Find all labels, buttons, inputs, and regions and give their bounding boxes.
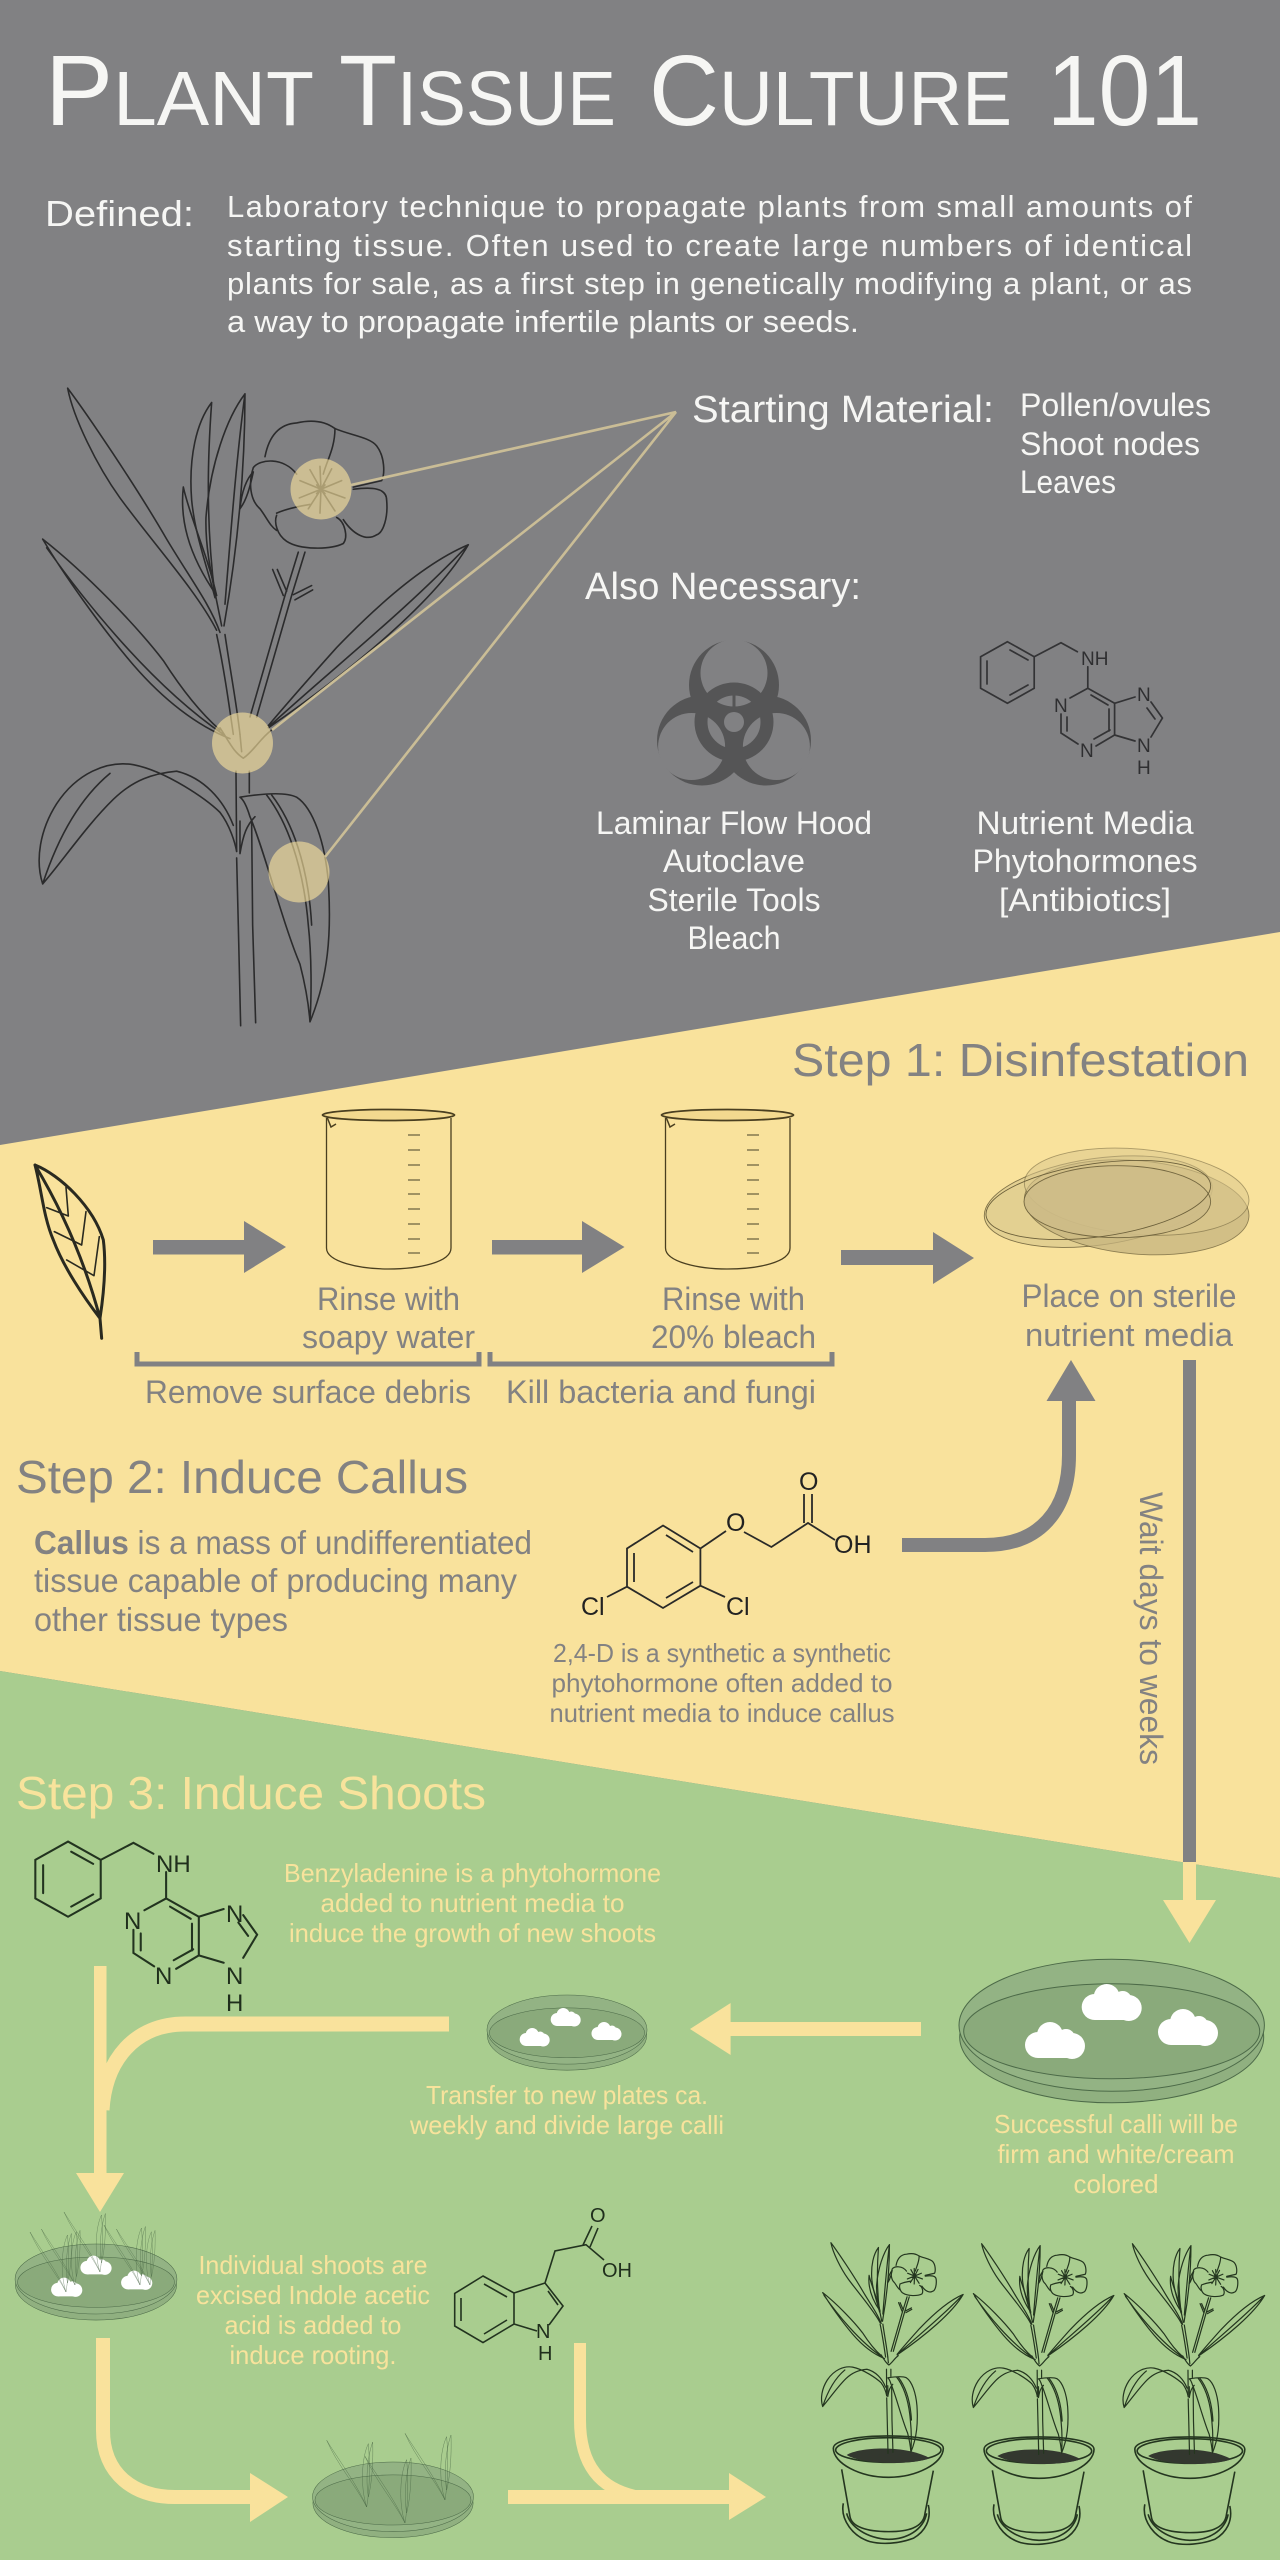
equipment list: Autoclave bbox=[663, 843, 805, 879]
molecule: benzyladenine: N bbox=[1080, 741, 1094, 762]
text: remove surface debris: Remove surface debris bbox=[145, 1374, 471, 1410]
molecule: benzyladenine large: N bbox=[124, 1908, 141, 1935]
icon: sterile petri dishes bbox=[978, 1139, 1253, 1264]
icon: beaker soapy water bbox=[322, 1110, 454, 1269]
title: PLANT bbox=[45, 35, 314, 147]
step 1 heading: Step 1: Disinfestation bbox=[792, 1034, 1249, 1086]
equipment list: Bleach bbox=[688, 920, 780, 956]
text: place on sterile nutrient media: Place on sterile bbox=[1022, 1278, 1236, 1314]
definition paragraph: a way to propagate infertile plants or seeds. bbox=[227, 304, 859, 339]
icon: large petri dish with calli bbox=[959, 1959, 1264, 2103]
equipment list: Laminar Flow Hood bbox=[596, 805, 872, 841]
molecule: 2,4-D bbox=[581, 1468, 872, 1621]
starting material list: Pollen/ovules bbox=[1020, 387, 1211, 423]
plant line drawing bbox=[39, 388, 468, 1026]
molecule: benzyladenine large: H bbox=[226, 1990, 243, 2017]
text: successful calli bbox=[994, 2109, 1238, 2199]
starting material list: Shoot nodes bbox=[1020, 426, 1200, 462]
text: 2,4-D description: 2,4-D is a synthetic a synthetic bbox=[553, 1638, 891, 1668]
molecule: benzyladenine large: N bbox=[226, 1963, 243, 1990]
molecule: 2,4-D: Cl bbox=[726, 1593, 750, 1621]
molecule: 2,4-D: O bbox=[799, 1468, 818, 1496]
molecule: benzyladenine: N bbox=[1054, 696, 1068, 717]
molecule: benzyladenine: N bbox=[1137, 685, 1151, 706]
icon: biohazard bbox=[657, 642, 811, 786]
text: benzyladenine description: Benzyladenine is a phytohormone bbox=[284, 1858, 661, 1888]
starting material heading: Starting Material: bbox=[692, 389, 994, 431]
arrow: hormone and transfer to shoot plate bbox=[76, 1966, 449, 2212]
media list: Phytohormones bbox=[972, 843, 1198, 879]
text: kill bacteria and fungi: Kill bacteria and fungi bbox=[506, 1374, 816, 1410]
text: rinse with soapy water bbox=[302, 1281, 475, 1355]
arrow: 2,4-D to media bbox=[902, 1360, 1096, 1545]
molecule: 2,4-D: OH bbox=[834, 1531, 872, 1559]
also necessary heading: Also Necessary: bbox=[585, 566, 861, 608]
text: individual shoots bbox=[196, 2250, 430, 2370]
media list bbox=[972, 805, 1198, 918]
text: individual shoots: excised Indole acetic bbox=[196, 2280, 430, 2310]
text: successful calli: Successful calli will be bbox=[994, 2109, 1238, 2139]
text: successful calli: colored bbox=[1074, 2169, 1158, 2199]
potted plant 3 bbox=[1123, 2244, 1265, 2544]
arrow: indole acid and bottom plate to pots bbox=[508, 2343, 766, 2520]
molecule: benzyladenine large: N bbox=[226, 1901, 243, 1928]
arrow: large dish to small dish bbox=[690, 2003, 921, 2055]
title bbox=[45, 35, 1202, 147]
highlight: shoot node bbox=[212, 712, 273, 774]
highlight: leaf bbox=[268, 842, 330, 902]
potted plant 1 bbox=[822, 2243, 963, 2543]
definition label: Defined: bbox=[45, 193, 194, 234]
text: place on sterile nutrient media: nutrient media bbox=[1025, 1317, 1233, 1353]
background: yellow section bbox=[0, 932, 1280, 1878]
molecule: benzyladenine: N bbox=[1137, 736, 1151, 757]
text: rinse with bleach: Rinse with bbox=[662, 1281, 805, 1317]
title: CULTURE bbox=[649, 35, 1012, 147]
background: green section bbox=[0, 1671, 1280, 2560]
molecule: benzyladenine large bbox=[35, 1842, 257, 2017]
text: 2,4-D description: phytohormone often added to bbox=[552, 1668, 892, 1698]
callus description bbox=[34, 1524, 532, 1638]
molecule: benzyladenine: H bbox=[1137, 758, 1151, 779]
molecule: benzyladenine large: NH bbox=[156, 1851, 191, 1878]
callout lines to starting material bbox=[272, 412, 676, 857]
text: 2,4-D description: nutrient media to induce callus bbox=[550, 1698, 894, 1728]
definition paragraph: Laboratory technique to propagate plants from small amounts of bbox=[227, 189, 1192, 224]
callus description: Callus is a mass of undifferentiated bbox=[34, 1524, 532, 1561]
arrow: shoot plate to bottom plate bbox=[103, 2338, 288, 2522]
text: rinse with soapy water: soapy water bbox=[302, 1319, 475, 1355]
icon: beaker bleach bbox=[662, 1110, 794, 1269]
icon: petri dish with shoots on calli bbox=[15, 2212, 177, 2320]
media list: Nutrient Media bbox=[976, 805, 1194, 841]
text: successful calli: firm and white/cream bbox=[998, 2139, 1234, 2169]
definition paragraph bbox=[227, 189, 1192, 339]
molecule: indole acetic acid bbox=[455, 2205, 632, 2365]
definition paragraph: plants for sale, as a first step in genetically modifying a plant, or as bbox=[227, 266, 1192, 301]
equipment list bbox=[596, 805, 872, 956]
text: transfer to new plates: weekly and divide large calli bbox=[409, 2110, 724, 2140]
icon: petri dish with shoots bbox=[313, 2433, 473, 2538]
molecule: 2,4-D: Cl bbox=[581, 1593, 605, 1621]
step 3 heading: Step 3: Induce Shoots bbox=[16, 1767, 486, 1819]
molecule: benzyladenine: NH bbox=[1081, 649, 1108, 670]
potted plant 2 bbox=[972, 2244, 1114, 2544]
molecule: indole acetic acid: H bbox=[538, 2343, 552, 2365]
bracket: soap stage bbox=[137, 1352, 479, 1364]
starting material list: Leaves bbox=[1020, 464, 1116, 500]
callus description: other tissue types bbox=[34, 1601, 288, 1638]
callus description: tissue capable of producing many bbox=[34, 1562, 517, 1599]
illustration: oleander plant with highlighted sources bbox=[39, 388, 676, 1026]
equipment list: Sterile Tools bbox=[648, 882, 820, 918]
icon: leaf bbox=[35, 1165, 105, 1338]
text: benzyladenine description bbox=[284, 1858, 661, 1948]
starting material list bbox=[1020, 387, 1211, 500]
text: transfer to new plates bbox=[409, 2080, 724, 2140]
molecule: benzyladenine large: N bbox=[155, 1963, 172, 1990]
molecule: 2,4-D: O bbox=[726, 1509, 745, 1537]
arrow: bleach to plate bbox=[841, 1232, 974, 1284]
text: benzyladenine description: added to nutrient media to bbox=[320, 1888, 624, 1918]
title: TISSUE bbox=[339, 35, 616, 147]
molecule: indole acetic acid: N bbox=[536, 2321, 550, 2343]
step 2 heading: Step 2: Induce Callus bbox=[16, 1451, 468, 1503]
media list: [Antibiotics] bbox=[999, 882, 1171, 918]
molecule: indole acetic acid: OH bbox=[602, 2260, 632, 2282]
bracket: bleach stage bbox=[490, 1352, 832, 1364]
text: individual shoots: induce rooting. bbox=[230, 2340, 396, 2370]
icon: small petri dish with calli bbox=[487, 1995, 647, 2070]
text: place on sterile nutrient media bbox=[1022, 1278, 1236, 1353]
arrow: leaf to soapy water bbox=[153, 1221, 286, 1273]
molecule: indole acetic acid: O bbox=[590, 2205, 606, 2227]
text: 2,4-D description bbox=[550, 1638, 894, 1728]
text: rinse with bleach bbox=[651, 1281, 816, 1355]
text: benzyladenine description: induce the growth of new shoots bbox=[289, 1918, 656, 1948]
text: transfer to new plates: Transfer to new plates ca. bbox=[426, 2080, 708, 2110]
text: rinse with bleach: 20% bleach bbox=[651, 1319, 816, 1355]
arrow: wait days to weeks bbox=[1163, 1360, 1216, 1943]
text: rinse with soapy water: Rinse with bbox=[317, 1281, 460, 1317]
highlight: flower bbox=[290, 458, 352, 520]
definition paragraph: starting tissue. Often used to create large numbers of identical bbox=[227, 228, 1192, 263]
arrow: soapy water to bleach bbox=[492, 1221, 624, 1273]
text: individual shoots: acid is added to bbox=[224, 2310, 402, 2340]
title: 101 bbox=[1047, 35, 1202, 147]
molecule: benzyladenine bbox=[981, 642, 1162, 779]
text: wait days to weeks: Wait days to weeks bbox=[1133, 1492, 1169, 1765]
text: individual shoots: Individual shoots are bbox=[198, 2250, 428, 2280]
